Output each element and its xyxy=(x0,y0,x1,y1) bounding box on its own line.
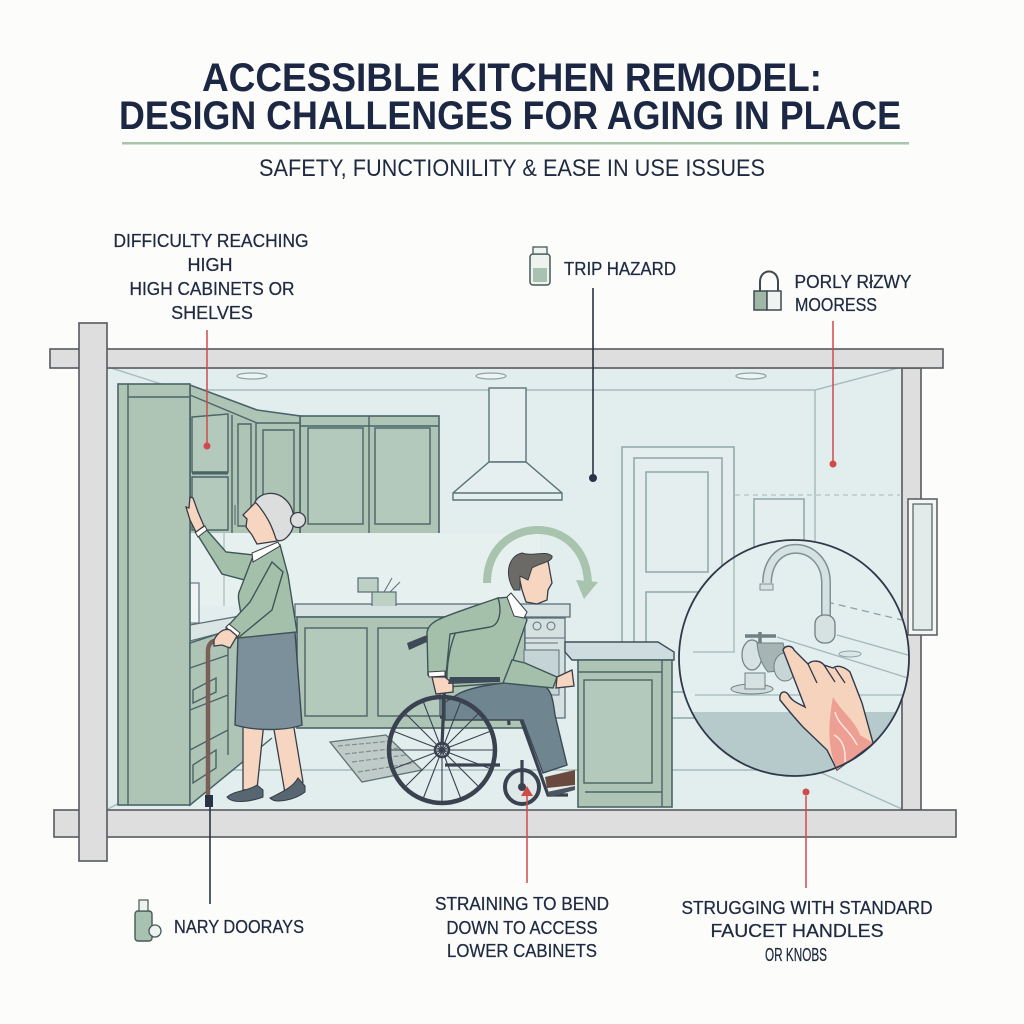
label: narrow doorways xyxy=(135,805,304,941)
upper wall cabinets xyxy=(190,385,439,534)
subtitle: SAFETY, FUNCTIONILITY & EASE IN USE ISSUES xyxy=(259,155,765,182)
cuffs and hands xyxy=(428,671,445,677)
icon: turning arrow xyxy=(487,530,598,599)
label: straining to bend: LOWER CABINETS xyxy=(447,941,597,961)
label: difficulty reaching high cabinets xyxy=(114,231,308,450)
torso xyxy=(238,545,297,638)
holding hand xyxy=(214,629,237,648)
label: narrow doorways: NARY DOORAYS xyxy=(174,917,304,937)
title: ACCESSIBLE KITCHEN REMODEL: xyxy=(202,56,822,100)
hand xyxy=(780,646,873,770)
figure: elderly woman with cane xyxy=(186,493,306,807)
panel: kitchen room xyxy=(108,367,902,809)
counter and lower cabinets xyxy=(190,533,570,728)
label: straining to bend: DOWN TO ACCESS xyxy=(446,918,598,938)
collar xyxy=(252,542,280,562)
circle outline xyxy=(679,540,909,776)
label: poorly lit hallway xyxy=(754,272,912,468)
neck and face xyxy=(243,497,285,544)
label: struggling with faucet handles: OR KNOBS xyxy=(765,945,827,965)
stove xyxy=(524,618,565,718)
label: poorly lit hallway: MOORESS xyxy=(795,295,877,315)
ceiling lights xyxy=(237,373,766,379)
label: trip hazard: TRIP HAZARD xyxy=(564,259,676,279)
label: trip hazard xyxy=(530,247,676,482)
label: struggling with faucet handles: STRUGGING WITH STANDARD xyxy=(682,898,932,918)
hair xyxy=(508,553,552,590)
main wheel xyxy=(389,697,495,803)
raised arm xyxy=(197,528,256,583)
sink basin xyxy=(692,712,896,776)
label: struggling with faucet handles xyxy=(682,788,932,965)
label: difficulty reaching high cabinets: HIGH xyxy=(188,255,232,275)
small caster wheel xyxy=(505,770,539,804)
label: straining to bend: STRAINING TO BEND xyxy=(435,894,609,914)
label: poorly lit hallway: PORLY RłZWY xyxy=(794,272,912,292)
range hood xyxy=(453,388,562,500)
hair xyxy=(255,493,294,541)
label: struggling with faucet handles: FAUCET HANDLES xyxy=(710,921,884,941)
chair frame xyxy=(440,633,568,795)
shoes xyxy=(227,778,305,802)
push handle xyxy=(407,635,427,650)
hair bun xyxy=(290,512,306,528)
callout circle: faucet close-up xyxy=(675,540,915,782)
burn mark on hand xyxy=(829,697,873,770)
tall cabinet xyxy=(118,384,272,805)
cane xyxy=(208,641,228,795)
title xyxy=(119,56,901,138)
arm holding cane xyxy=(226,562,283,638)
legs xyxy=(243,722,303,793)
armrest xyxy=(448,677,500,684)
label: straining to bend xyxy=(435,786,609,961)
label: difficulty reaching high cabinets: HIGH CABINETS OR xyxy=(130,279,294,299)
far arm xyxy=(503,660,557,688)
label: difficulty reaching high cabinets: SHELVES xyxy=(171,303,253,323)
door xyxy=(622,447,804,718)
label: difficulty reaching high cabinets: DIFFICULTY REACHING xyxy=(114,231,308,251)
walls frame xyxy=(50,323,956,861)
kitchen island xyxy=(565,642,674,807)
title: DESIGN CHALLENGES FOR AGING IN PLACE xyxy=(119,94,901,138)
collar xyxy=(507,593,527,618)
figure: man in wheelchair xyxy=(389,553,575,804)
legs xyxy=(445,682,567,773)
skirt xyxy=(235,632,302,730)
floor rug xyxy=(330,735,422,782)
room interior xyxy=(108,367,902,809)
shoe xyxy=(545,770,575,788)
head xyxy=(519,561,552,604)
faucet xyxy=(767,549,826,620)
near arm xyxy=(427,598,500,675)
torso xyxy=(447,597,527,687)
